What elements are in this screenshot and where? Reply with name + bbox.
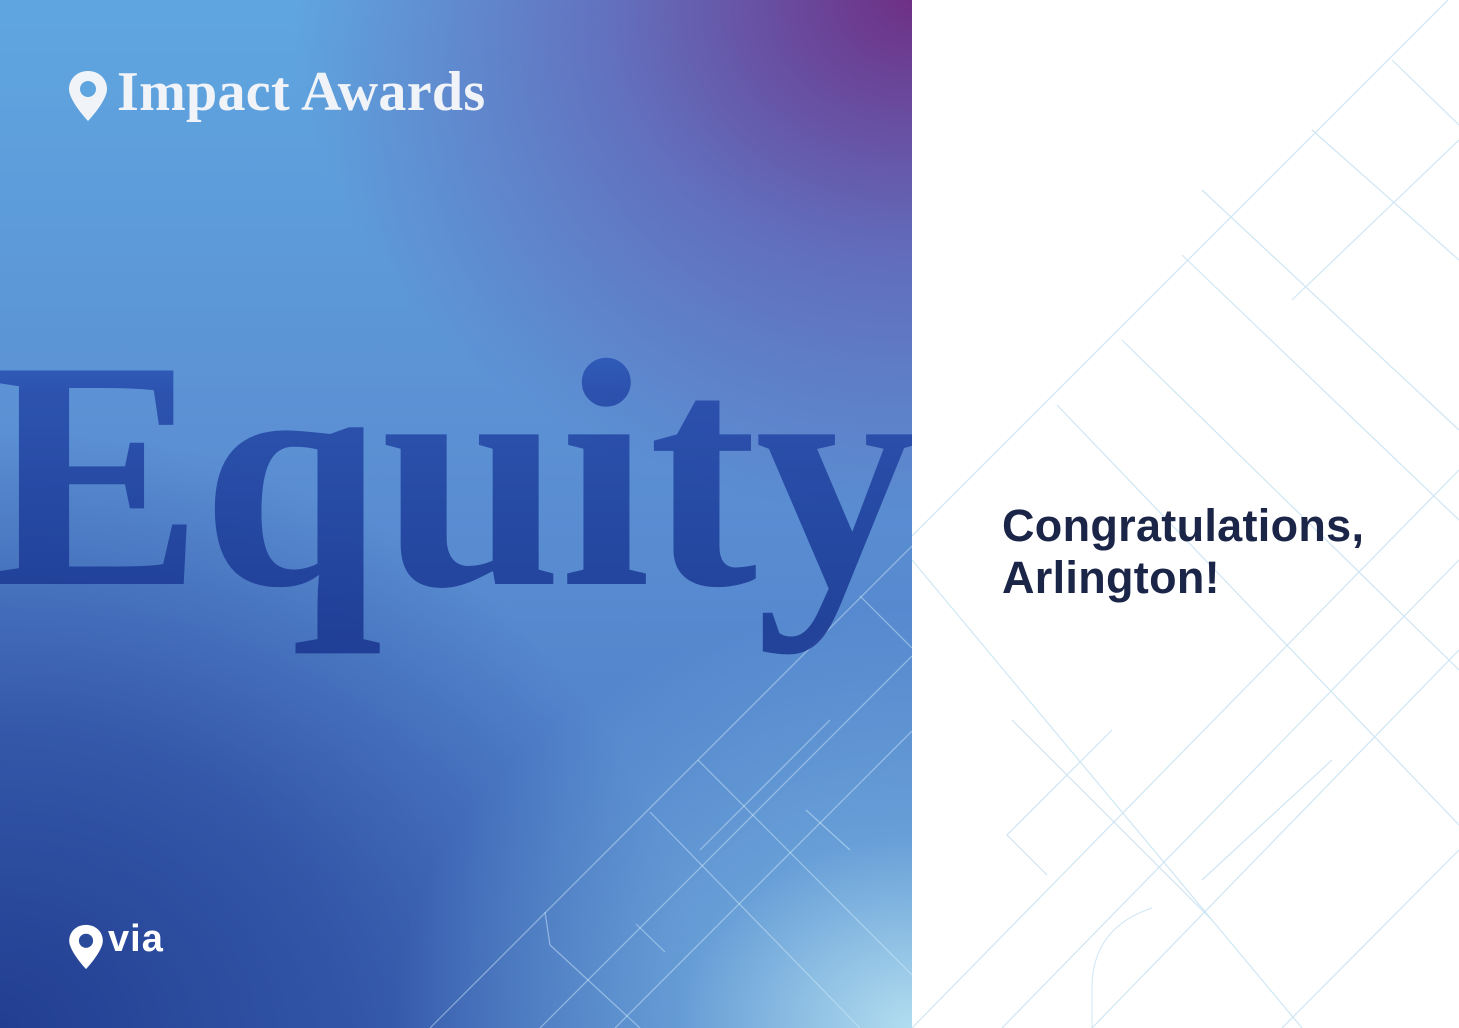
panel: gradient left bbox=[0, 0, 912, 1028]
text: congratulations: Arlington! bbox=[1002, 552, 1220, 603]
logo: Impact Awards bbox=[69, 61, 485, 123]
logo: via: via bbox=[108, 918, 164, 960]
icon: pin bbox=[69, 71, 107, 121]
decorative street lines left bbox=[430, 546, 912, 1028]
text: Impact Awards: Impact Awards bbox=[117, 61, 485, 123]
decorative street lines right bbox=[912, 0, 1459, 1028]
text: congratulations bbox=[1002, 500, 1364, 603]
heading: Equity: Equity bbox=[0, 293, 912, 655]
logo: via bbox=[69, 918, 164, 969]
text: congratulations: Congratulations, bbox=[1002, 500, 1364, 551]
